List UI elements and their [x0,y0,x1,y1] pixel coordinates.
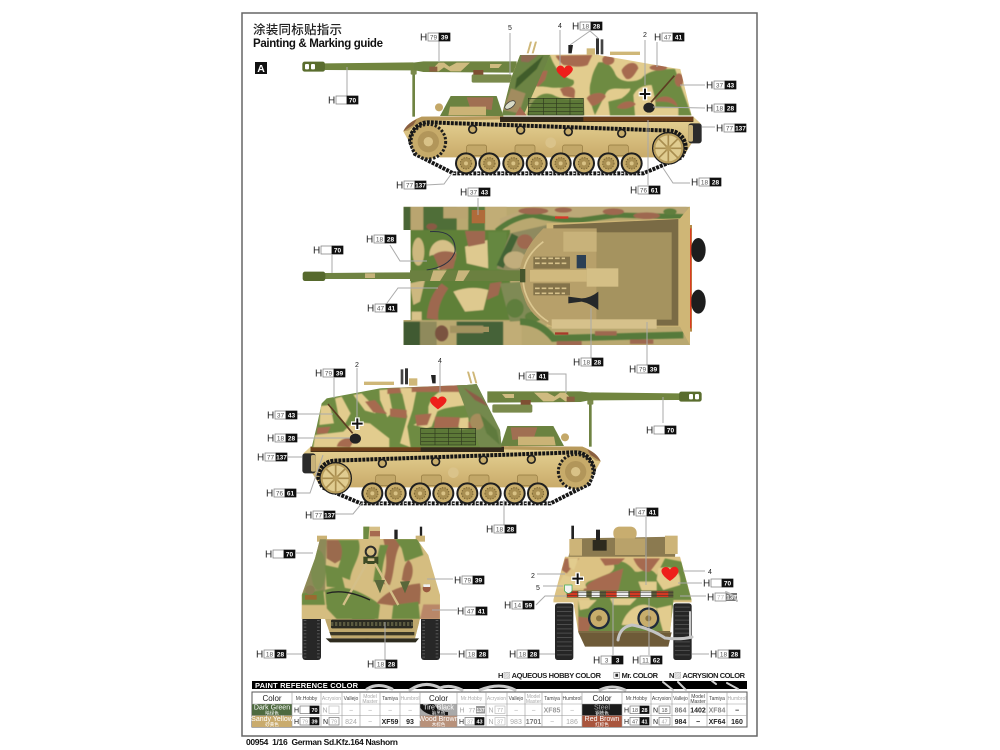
label: H 77 137: 77 [726,125,733,132]
gun from above [325,272,410,279]
label: H 18 28: H [367,660,374,670]
row: Sandy Yellow, Wood Brown, Red Brown: N [488,719,494,726]
label: H 79 39: 39 [650,366,657,373]
label: H 18 28: H [509,650,516,660]
table header: Model [363,694,377,700]
label: H 11 62: H [632,656,639,666]
label: H 77 137: 77 [267,454,274,461]
tank view: right side [302,38,702,174]
label: H 77 137: 77 [315,512,322,519]
label: H 18 28: 28 [593,23,600,30]
label: H 70 [313,246,343,256]
row: Sandy Yellow, Wood Brown, Red Brown: 160 [731,719,743,726]
heart marking [556,65,573,78]
table header: Model [527,694,540,700]
legend: paint brands: N▨ ACRYSION COLOR [669,671,746,680]
label: H 18 28 [486,524,516,536]
row: Sandy Yellow, Wood Brown, Red Brown: 37 [467,720,473,726]
label: H 47 41: 47 [467,608,474,615]
row: Sandy Yellow, Wood Brown, Red Brown: 红棕色 [595,721,609,728]
row: Dark Green, Tire Black, Steel: Tire Black [423,704,454,712]
callout: number 4 rear: 4 [708,569,712,576]
callout: number 5 rear: 5 [536,585,540,592]
label: H 11 62: 11 [642,657,649,664]
label: H 79 39 [420,32,450,44]
label: H 70 [646,426,676,436]
label: H 37 43: 43 [481,189,488,196]
row: Dark Green, Tire Black, Steel: 137 [476,708,485,714]
paint reference bar: PAINT REFERENCE COLOR [255,681,359,690]
row: Dark Green, Tire Black, Steel: N [488,708,494,714]
row: Dark Green, Tire Black, Steel: − [368,708,372,714]
cross marking [639,88,651,100]
row: Dark Green, Tire Black, Steel: Dark Green [254,704,290,712]
legend: paint brands [498,671,746,680]
row: Dark Green, Tire Black, Steel: 70 [311,708,318,714]
label: H 76 61 [266,488,296,500]
label: H 70: H [703,578,710,590]
label: H 47 41: 47 [377,305,384,312]
footer text: 00954 1/16 German Sd.Kfz.164 Nashorn [246,737,398,747]
label: H 79 39 [629,364,659,376]
label: H 37 43: 37 [716,82,723,89]
label: H 77 137 washed: 77 [717,594,724,601]
label: H 18 28: 18 [266,651,273,658]
row: Dark Green, Tire Black, Steel: 28 [641,708,648,714]
label: H 79 39: H [454,576,461,586]
label: H 70: H [646,426,653,436]
label: H 47 41: 47 [528,373,535,380]
label: H 70: 70 [724,580,731,587]
label: H 70 [328,96,358,106]
label: H 18 28: 28 [288,435,295,442]
label: H 37 43: H [267,410,274,422]
label: H 18 28 [367,660,397,670]
table header: Tamiya [382,696,398,702]
paint reference table [251,692,747,728]
label: H 47 41: H [457,606,464,618]
label: H 18 28: H [267,434,274,444]
label: H 76 61: 76 [640,187,647,194]
row: Dark Green, Tire Black, Steel: N [653,708,658,714]
label: H 76 61: 61 [287,490,294,497]
label: H 77 137: 137 [276,454,287,461]
label: H 37 43 [267,410,297,422]
row: Sandy Yellow, Wood Brown, Red Brown: Wood Brown [419,716,459,723]
row: Sandy Yellow, Wood Brown, Red Brown [251,716,743,728]
row: Sandy Yellow, Wood Brown, Red Brown: N [653,719,658,726]
row: Dark Green, Tire Black, Steel: 77 [469,708,476,714]
table header: Vallejo [509,696,524,702]
legend: paint brands: H▨ AQUEOUS HOBBY COLOR [498,671,602,680]
table header [262,694,746,705]
watermark [367,592,738,690]
table header: Master [362,699,378,705]
label: H 18 28: 18 [377,661,384,668]
table header: Color [262,694,282,703]
label: H 18 28: H [256,650,263,660]
row: Dark Green, Tire Black, Steel: − [349,708,353,714]
label: H 18 28: H [366,234,373,246]
label: H 18 28 [366,234,396,246]
label: H 70: 70 [286,551,293,558]
label: H 47 41: H [628,508,635,518]
row: Sandy Yellow, Wood Brown, Red Brown: 43 [476,720,483,726]
label: H 18 28: 28 [530,651,537,658]
label: H 18 28: 18 [582,23,589,30]
label: H 79 39: 79 [464,577,471,584]
page frame [242,13,757,736]
label: H 18 28: H [573,358,580,368]
label: H 79 39 [454,576,484,586]
badge A: A [257,63,265,75]
row: Sandy Yellow, Wood Brown, Red Brown: Red Brown [585,716,619,723]
label: H 18 28: 18 [496,526,503,533]
row: Dark Green, Tire Black, Steel: 864 [675,708,686,714]
row: Sandy Yellow, Wood Brown, Red Brown: 984 [675,719,686,726]
label: H 18 28 [267,434,297,444]
label: H 77 137 [257,452,287,464]
label: H 76 61: H [630,186,637,196]
label: H 79 39: 39 [475,577,482,584]
label: H 18 28: 28 [594,359,601,366]
upper strip [403,207,411,232]
badge A [255,62,267,75]
label: H 37 43: 43 [727,82,734,89]
row: Dark Green, Tire Black, Steel: − [570,708,574,714]
label: H 18 28: H [706,104,713,114]
color swatches [252,704,622,727]
label: H 3 3: 3 [605,657,609,664]
label: H 18 28 [691,178,721,188]
label: H 18 28: H [710,650,717,660]
cross marking [571,572,584,585]
label: H 18 28 [256,650,286,660]
label: H 37 43: 43 [288,412,295,419]
table header: Humbrol [401,696,419,702]
cross marking [351,417,364,430]
row: Sandy Yellow, Wood Brown, Red Brown: 79 [302,720,308,726]
label: H 70: 70 [334,247,341,254]
label: H 47 41: H [654,32,661,44]
label: H 18 28 [706,104,736,114]
table header: Color [429,694,448,703]
label: H 47 41 [457,606,487,618]
row: Sandy Yellow, Wood Brown, Red Brown: 186 [566,719,578,726]
label: H 3 3 [593,656,623,666]
label: H 70: 70 [667,427,674,434]
label: H 18 28: H [572,22,579,32]
row: Sandy Yellow, Wood Brown, Red Brown: H [294,719,299,726]
row: Sandy Yellow, Wood Brown, Red Brown: − [368,719,372,726]
label: H 18 28: H [691,178,698,188]
label: H 47 41 [518,372,548,382]
row: Dark Green, Tire Black, Steel: 钢铁色 [595,710,609,716]
heart marking [430,396,447,409]
row: Dark Green, Tire Black, Steel: H [294,708,299,714]
label: H 47 41: H [367,304,374,314]
row: Dark Green, Tire Black, Steel: XF85 [544,708,560,714]
label: H 77 137 [396,180,426,192]
label: H 18 28: 28 [277,651,284,658]
label: H 70: H [328,96,335,106]
label: H 18 28: 18 [376,236,383,243]
label: H 77 137 [305,510,335,522]
leader lines [287,30,715,660]
label: H 76 61 [630,186,660,196]
label: H 11 62 [632,656,662,666]
label: H 18 28: 18 [720,651,727,658]
row: Dark Green, Tire Black, Steel: − [531,708,536,714]
label: H 3 3: 3 [616,657,620,664]
title: Painting & Marking guide: Painting & Marking guide [253,38,383,50]
row: Sandy Yellow, Wood Brown, Red Brown: 39 [311,720,318,726]
tank view: rear [552,526,693,660]
label: H 37 43: 37 [277,412,284,419]
label: H 18 28: 18 [701,179,708,186]
table header: Vallejo [344,696,359,702]
label: H 77 137 washed [707,592,737,604]
tank view: left side [302,368,702,504]
glacis [497,225,547,275]
label: H 47 41: 47 [664,34,671,41]
label: H 18 28: 28 [387,236,394,243]
row: Sandy Yellow, Wood Brown, Red Brown: 木棕色 [432,721,446,728]
label: H 79 39: H [315,368,322,380]
label: H 70 [265,550,295,560]
row: Sandy Yellow, Wood Brown, Red Brown: 79 [331,720,337,726]
legend: paint brands: ▣ Mr. COLOR [613,671,659,680]
label: H 77 137: 77 [406,182,413,189]
label: H 79 39: H [420,32,427,44]
label: H 11 62: 62 [653,657,660,664]
label: H 14 59: H [504,600,511,612]
row: Sandy Yellow, Wood Brown, Red Brown: 47 [661,720,668,726]
label: H 37 43: 37 [470,189,477,196]
row: Dark Green, Tire Black, Steel: 18 [661,708,668,714]
label: H 47 41: 41 [388,305,395,312]
label: H 79 39: 79 [639,366,646,373]
label: H 18 28 [458,650,488,660]
row: Dark Green, Tire Black, Steel: − [408,708,412,714]
label: H 37 43: H [460,188,467,198]
label: H 18 28: H [458,650,465,660]
row: Dark Green, Tire Black, Steel: H [459,708,465,714]
label: H 18 28: 18 [716,105,723,112]
shovel [651,76,674,102]
label: H 18 28: 28 [388,661,395,668]
row: Sandy Yellow, Wood Brown, Red Brown: N [323,719,328,726]
label: H 77 137: H [305,510,312,522]
table header: Humbrol [728,696,746,702]
label: H 18 28: 18 [468,651,475,658]
heart marking [661,567,679,581]
label: H 70: H [313,246,320,256]
label: H 18 28: 18 [277,435,284,442]
label: H 18 28: 18 [519,651,526,658]
label: H 14 59 [504,600,534,612]
row: Sandy Yellow, Wood Brown, Red Brown: 41 [641,720,648,726]
label: H 18 28: 28 [712,179,719,186]
title: Chinese: 涂装同标贴指示 [253,22,342,37]
callout: number 5: 5 [508,25,512,32]
label: H 77 137: 137 [735,125,746,132]
label: H 37 43 [706,80,736,92]
label: H 77 137: H [716,124,723,134]
row: Dark Green, Tire Black, Steel: 77 [497,708,503,714]
tank view: top [303,207,706,346]
row: Sandy Yellow, Wood Brown, Red Brown: − [550,719,554,726]
row: Sandy Yellow, Wood Brown, Red Brown: 93 [406,719,414,726]
label: H 18 28 [572,22,602,32]
label: H 70 [703,578,733,590]
label: H 77 137 [716,124,746,134]
emblem [503,99,517,111]
paint reference bar [252,681,747,690]
label: H 18 28: 28 [731,651,738,658]
label: H 79 39: 39 [336,370,343,377]
label: H 70: 70 [349,97,356,104]
label: H 14 59: 59 [525,602,532,609]
label: H 47 41 [628,508,658,518]
callout: number 4 lower: 4 [438,358,442,365]
spare wheels [588,607,610,629]
row: Sandy Yellow, Wood Brown, Red Brown: − [696,719,700,726]
label: H 77 137: H [257,452,264,464]
row: Dark Green, Tire Black, Steel: 胎黑色 [432,710,446,716]
label: H 77 137: 137 [324,512,335,519]
table header: Master [690,699,706,705]
label: H 79 39 [315,368,345,380]
row: Dark Green, Tire Black, Steel: − [388,708,392,714]
callout: number 4: 4 [558,23,562,30]
table header: Mr.Hobby [296,696,318,702]
label: H 47 41: 47 [638,509,645,516]
label: H 47 41 [654,32,684,44]
label: H 37 43 [460,188,490,198]
label: H 18 28: 28 [727,105,734,112]
row: Dark Green, Tire Black, Steel: 1402 [690,708,706,714]
row: Dark Green, Tire Black, Steel: − [514,708,518,714]
row: Dark Green, Tire Black, Steel: Steel [594,704,610,712]
label: H 77 137 washed: 137 [726,594,737,601]
emblem [565,585,572,593]
label: H 76 61: 61 [651,187,658,194]
table header: Mr.Hobby [461,696,483,702]
label: H 47 41: 41 [675,34,682,41]
label: H 18 28 [509,650,539,660]
center plates [410,230,510,320]
row: Sandy Yellow, Wood Brown, Red Brown: 47 [632,720,638,726]
label: H 70: H [265,550,272,560]
label: H 76 61: H [266,488,273,500]
label: H 77 137: H [396,180,403,192]
table header: Master [526,699,541,705]
label: H 79 39: 39 [441,34,448,41]
label: H 18 28: 28 [479,651,486,658]
label: H 79 39: 79 [325,370,332,377]
label: H 47 41: 41 [478,608,485,615]
label: H 76 61: 76 [276,490,283,497]
tank view: front [300,527,443,660]
row: Sandy Yellow, Wood Brown, Red Brown: Sandy Yellow [251,716,294,723]
shovel [328,404,353,433]
lower strip [403,322,420,346]
row: Sandy Yellow, Wood Brown, Red Brown: XF64 [709,719,725,726]
table header: Humbrol [563,696,581,702]
row: Dark Green, Tire Black, Steel: XF84 [709,708,725,714]
table header: Model [691,694,705,700]
table header: Tamiya [709,696,725,702]
label: H 79 39: 79 [430,34,437,41]
row: Sandy Yellow, Wood Brown, Red Brown: 砂黄色 [265,721,279,728]
table header: Vallejo [673,696,688,702]
table header: Color [592,694,612,703]
label: H 3 3: H [593,656,600,666]
table header: Acrysion [652,696,671,702]
table header: Acrysion [322,696,341,702]
striped rail [567,591,673,598]
label: H 77 137: 137 [415,182,426,189]
row: Sandy Yellow, Wood Brown, Red Brown: 983 [510,719,522,726]
label: H 47 41: H [518,372,525,382]
row: Dark Green, Tire Black, Steel: − [735,708,739,714]
row: Sandy Yellow, Wood Brown, Red Brown: 37 [497,720,503,726]
row: Sandy Yellow, Wood Brown, Red Brown: 824 [345,719,357,726]
table header: Tamiya [544,696,560,702]
label: H 47 41: 41 [539,373,546,380]
row: Sandy Yellow, Wood Brown, Red Brown: H [459,719,464,726]
row: Dark Green, Tire Black, Steel: H [624,708,629,714]
label: H 18 28: 28 [507,526,514,533]
label: H 18 28 [710,650,740,660]
table header: Mr.Hobby [626,696,648,702]
callout: number 2 lower: 2 [355,362,359,369]
row: Dark Green, Tire Black, Steel: N [322,708,328,714]
callout: number 2 rear: 2 [531,573,535,580]
label: H 79 39: H [629,364,636,376]
table header: Acrysion [487,696,506,702]
label: H 37 43: H [706,80,713,92]
label: H 77 137 washed: H [707,592,714,604]
label: H 18 28: H [486,524,493,536]
label: H 47 41: 41 [649,509,656,516]
row: Dark Green, Tire Black, Steel [254,704,739,716]
row: Sandy Yellow, Wood Brown, Red Brown: 1701 [526,719,541,726]
row: Dark Green, Tire Black, Steel: 暗绿色 [265,710,279,716]
label: H 14 59: 14 [514,602,521,609]
row: Dark Green, Tire Black, Steel: 18 [632,708,638,714]
label: H 18 28 [573,358,603,368]
label: H 18 28: 18 [583,359,590,366]
callout: number 2: 2 [643,32,647,39]
row: Sandy Yellow, Wood Brown, Red Brown: XF59 [382,719,398,726]
label: H 47 41 [367,304,397,314]
row: Sandy Yellow, Wood Brown, Red Brown: H [624,719,629,726]
